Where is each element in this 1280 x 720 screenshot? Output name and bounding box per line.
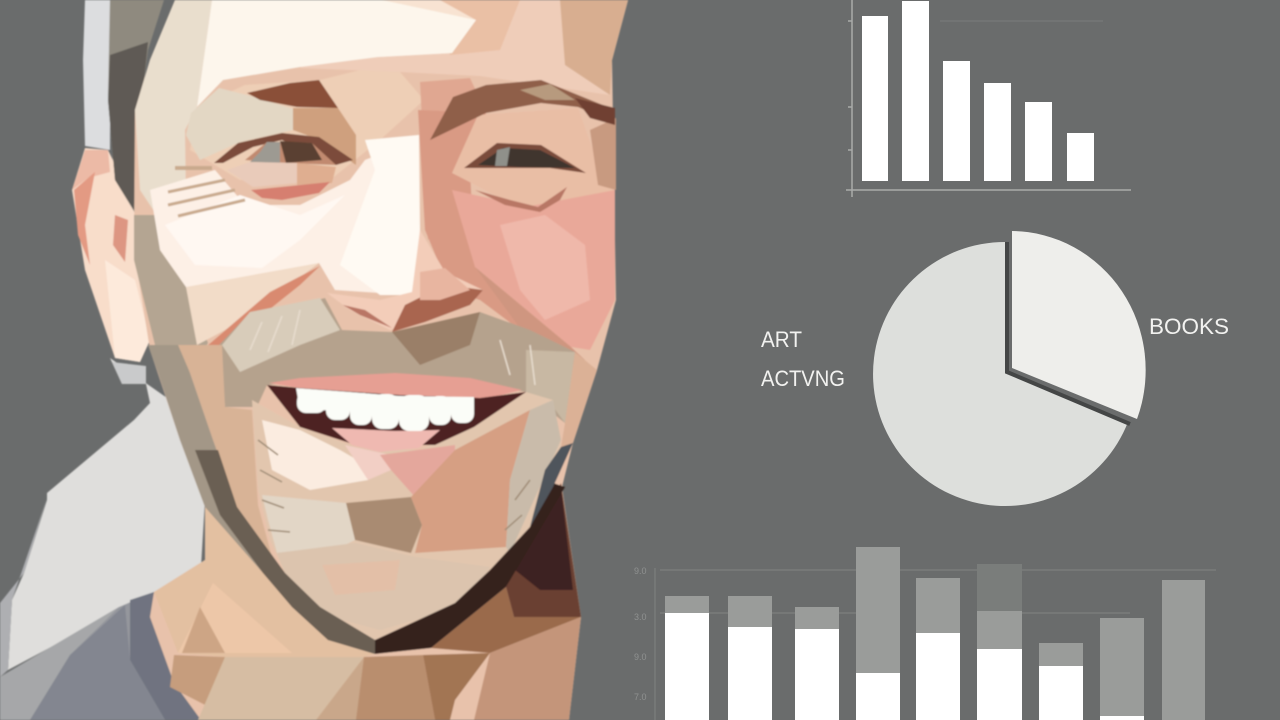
axis labels: 3.0 [634, 612, 647, 622]
ear [72, 148, 150, 362]
axis labels: 9.0 [634, 652, 647, 662]
wrinkles [168, 168, 245, 216]
bottom stacked bar chart [634, 547, 1216, 720]
hair [108, 0, 164, 213]
mustache [219, 298, 575, 423]
label: ACTVNG: ACTVNG [761, 366, 845, 391]
smile crease [186, 263, 319, 345]
brow left [247, 80, 338, 108]
label: ART: ART [761, 327, 802, 352]
chin and beard [178, 345, 561, 640]
axis labels: 9.0 [634, 566, 647, 576]
eye left [214, 133, 353, 200]
cheeks and midface [134, 70, 616, 372]
portrait: low-poly smiling man [0, 0, 628, 720]
skin base [134, 0, 628, 720]
pie chart [873, 231, 1146, 506]
axis labels [634, 566, 647, 702]
skin strip right of beard [561, 352, 597, 447]
teeth [296, 388, 474, 431]
forehead [135, 0, 628, 220]
neck triangles [154, 483, 581, 720]
jaw shadow line [148, 345, 573, 654]
mouth [267, 373, 526, 452]
label: BOOKS: BOOKS [1149, 314, 1229, 339]
top bar chart [846, 0, 1131, 197]
eye right [464, 143, 586, 212]
axis labels: 7.0 [634, 692, 647, 702]
brow right [430, 80, 615, 140]
shirt [0, 592, 201, 720]
tan strip between band and beard [178, 345, 285, 573]
background light shapes behind head [0, 0, 205, 677]
nose shadow [327, 230, 483, 330]
